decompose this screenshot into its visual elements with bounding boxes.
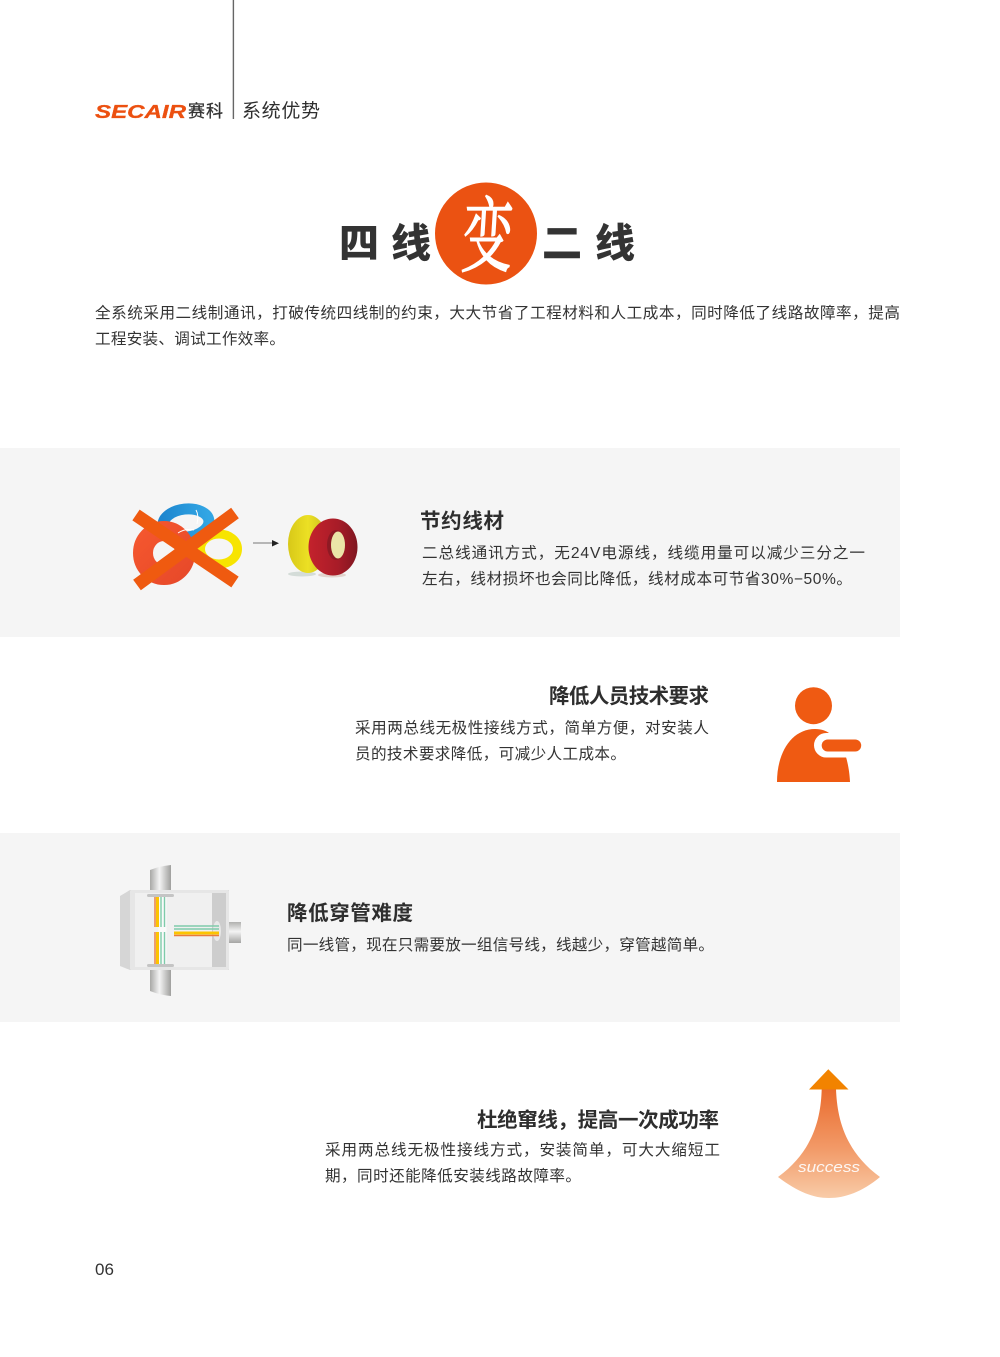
panel: lower technical requirements bbox=[355, 685, 874, 782]
panel: prevent crossed wires bbox=[325, 1069, 880, 1198]
body text: 左右，线材损坏也会同比降低，线材成本可节省30%−50%。 bbox=[422, 570, 852, 588]
title: four wires become two wires: 二 bbox=[542, 222, 582, 266]
arrow bbox=[253, 540, 279, 546]
body text bbox=[422, 544, 865, 588]
logo: Chinese brand name: 赛科 bbox=[188, 101, 223, 121]
icon: crossed-out multi-colour wire coils bbox=[136, 507, 238, 585]
title: four wires become two wires: 线 bbox=[595, 222, 635, 266]
panel: save wire material bbox=[0, 448, 900, 637]
intro paragraph: 工程安装、调试工作效率。 bbox=[95, 330, 285, 348]
page number: 06 bbox=[95, 1260, 114, 1279]
icon: orange circle with calligraphic character bbox=[435, 172, 537, 289]
heading: 节约线材 bbox=[420, 510, 504, 533]
body text: 员的技术要求降低，可减少人工成本。 bbox=[355, 745, 626, 763]
body text: 期，同时还能降低安装线路故障率。 bbox=[325, 1167, 581, 1185]
heading: 降低人员技术要求 bbox=[549, 685, 709, 708]
intro paragraph bbox=[95, 304, 900, 348]
header: brand and section name bbox=[95, 0, 320, 122]
panel: easier conduit threading bbox=[0, 833, 900, 1022]
title: four wires become two wires: 四 bbox=[339, 222, 379, 266]
heading: 杜绝窜线，提高一次成功率 bbox=[477, 1108, 719, 1132]
heading: 降低穿管难度 bbox=[287, 901, 413, 925]
icon: person bbox=[777, 687, 874, 782]
icon: orange circle with calligraphic character: 变 bbox=[459, 172, 517, 289]
header divider line bbox=[233, 0, 234, 119]
icon: success arrow: success bbox=[798, 1159, 861, 1176]
title: four wires become two wires bbox=[339, 172, 635, 289]
logo: SECAIR wordmark: SECAIR bbox=[95, 102, 186, 122]
title: four wires become two wires: 线 bbox=[391, 222, 431, 266]
body text bbox=[355, 719, 709, 763]
intro paragraph: 全系统采用二线制通讯，打破传统四线制的约束，大大节省了工程材料和人工成本，同时降低了线路故障率，提高 bbox=[95, 304, 900, 322]
body text: 采用两总线无极性接线方式，安装简单，可大大缩短工 bbox=[325, 1141, 720, 1159]
icon: two-colour wire coils bbox=[288, 515, 358, 578]
body text bbox=[325, 1141, 720, 1185]
icon: success arrow bbox=[778, 1069, 880, 1198]
body text: 同一线管，现在只需要放一组信号线，线越少，穿管越简单。 bbox=[287, 936, 714, 954]
section name: 系统优势 bbox=[242, 100, 320, 122]
body text: 采用两总线无极性接线方式，简单方便，对安装人 bbox=[355, 719, 709, 737]
icon: junction box with pipes bbox=[120, 865, 241, 996]
body text: 二总线通讯方式，无24V电源线，线缆用量可以减少三分之一 bbox=[422, 544, 865, 562]
